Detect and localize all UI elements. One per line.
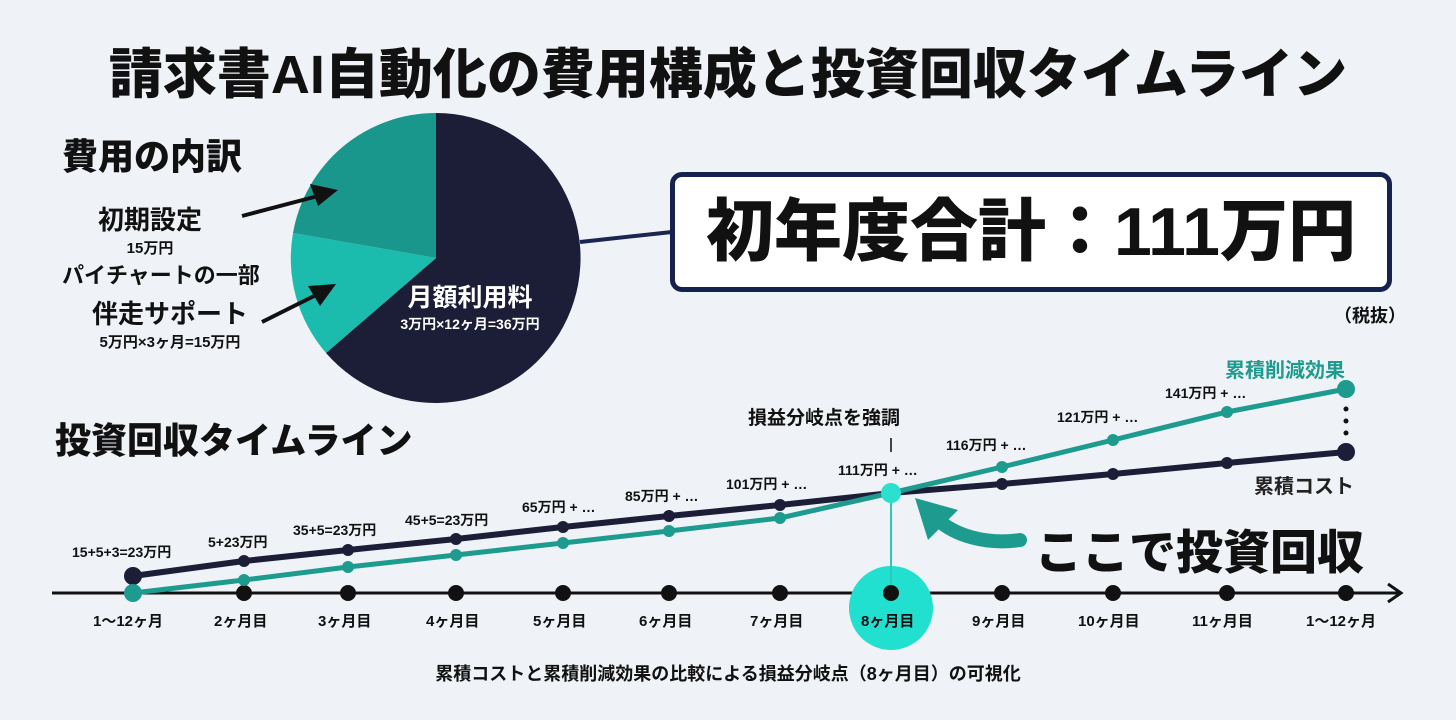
callout: ここで投資回収 bbox=[1035, 526, 1364, 579]
axis labels bbox=[93, 613, 1376, 630]
total box: 初年度合計：111万円 bbox=[706, 194, 1356, 270]
connector line bbox=[580, 232, 672, 242]
label: monthly fee: 月額利用料 bbox=[407, 284, 532, 312]
text: 65万円 + … bbox=[522, 499, 596, 515]
caption: 累積コストと累積削減効果の比較による損益分岐点（8ヶ月目）の可視化 bbox=[435, 664, 1021, 684]
heading: cost breakdown: 費用の内訳 bbox=[62, 136, 242, 177]
arrow: support bbox=[262, 284, 336, 322]
text: 10ヶ月目 bbox=[1078, 613, 1140, 630]
legend: savings: 累積削減効果 bbox=[1225, 360, 1345, 382]
break-even point bbox=[881, 483, 901, 503]
break-even label: 損益分岐点を強調 bbox=[748, 408, 900, 429]
label: pie note: パイチャートの一部 bbox=[62, 263, 260, 288]
text: 6ヶ月目 bbox=[639, 613, 692, 630]
axis bbox=[52, 584, 1401, 602]
text: 1〜12ヶ月 bbox=[1306, 613, 1376, 630]
label: initial setup: 初期設定 bbox=[98, 205, 202, 235]
label: support: 5万円×3ヶ月=15万円 bbox=[100, 334, 240, 351]
title: 請求書AI自動化の費用構成と投資回収タイムライン bbox=[109, 45, 1347, 105]
text: 121万円 + … bbox=[1057, 409, 1138, 425]
legend: cost: 累積コスト bbox=[1254, 476, 1354, 498]
text: 8ヶ月目 bbox=[861, 613, 914, 630]
cumulative cost line bbox=[124, 443, 1355, 585]
text: 1〜12ヶ月 bbox=[93, 613, 163, 630]
text: 45+5=23万円 bbox=[405, 512, 488, 528]
text: 2ヶ月目 bbox=[214, 613, 267, 630]
point labels: 15+5+3=23万円 bbox=[72, 544, 171, 560]
text: 5+23万円 bbox=[208, 534, 268, 550]
highlight circle month 8 bbox=[849, 566, 933, 650]
tick dots bbox=[236, 585, 1354, 601]
text: 7ヶ月目 bbox=[750, 613, 803, 630]
text: 141万円 + … bbox=[1165, 385, 1246, 401]
text: 35+5=23万円 bbox=[293, 522, 376, 538]
label: initial setup bbox=[98, 205, 202, 257]
text: 11ヶ月目 bbox=[1192, 613, 1253, 630]
label: support: 伴走サポート bbox=[92, 299, 248, 329]
text: 111万円 + … bbox=[838, 462, 918, 478]
curved arrow bbox=[915, 498, 1020, 541]
label: monthly fee bbox=[400, 284, 540, 332]
vertical line break-even bbox=[890, 493, 892, 593]
text: 5ヶ月目 bbox=[533, 613, 586, 630]
arrow: initial setup bbox=[242, 184, 338, 216]
text: 116万円 + … bbox=[946, 437, 1027, 453]
text: 101万円 + … bbox=[726, 476, 807, 492]
label: initial setup: 15万円 bbox=[127, 240, 173, 257]
text: 3ヶ月目 bbox=[318, 613, 371, 630]
tax note: （税抜） bbox=[1334, 306, 1406, 326]
total box bbox=[670, 172, 1392, 292]
label: support bbox=[92, 299, 248, 351]
text: 9ヶ月目 bbox=[972, 613, 1025, 630]
text: 4ヶ月目 bbox=[426, 613, 479, 630]
heading: timeline: 投資回収タイムライン bbox=[55, 420, 412, 461]
text: 85万円 + … bbox=[625, 488, 699, 504]
cumulative savings line bbox=[124, 380, 1355, 602]
label: monthly fee: 3万円×12ヶ月=36万円 bbox=[400, 316, 540, 332]
dotted connector bbox=[1344, 406, 1348, 436]
